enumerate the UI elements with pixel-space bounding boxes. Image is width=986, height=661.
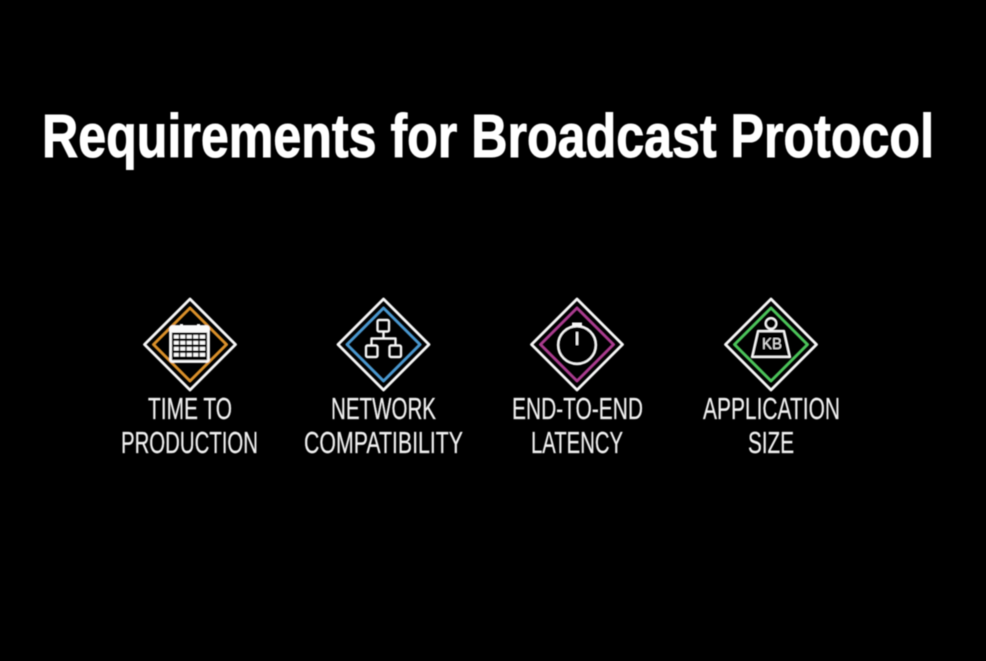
label: APPLICATION [703,391,840,426]
icon: stopwatch in magenta diamond [532,299,622,390]
label [703,391,840,460]
item: time to production [121,299,258,460]
label: PRODUCTION [121,425,258,460]
icon: kilobyte weight in green diamond [726,299,816,390]
icon: kilobyte weight in green diamond: KB [762,336,782,353]
label: END-TO-END [512,391,643,426]
label: SIZE [748,425,794,460]
label: COMPATIBILITY [304,425,463,460]
item: network compatibility [304,299,463,460]
icon: network in blue diamond [338,299,429,390]
label [512,391,643,460]
item: application size [703,299,840,460]
label: NETWORK [331,391,436,426]
label: TIME TO [148,391,232,426]
label: LATENCY [531,425,623,460]
content [42,102,934,460]
item: end-to-end latency [512,299,643,460]
icon: calendar in orange diamond [144,299,236,390]
label [304,391,463,460]
label [121,391,258,460]
